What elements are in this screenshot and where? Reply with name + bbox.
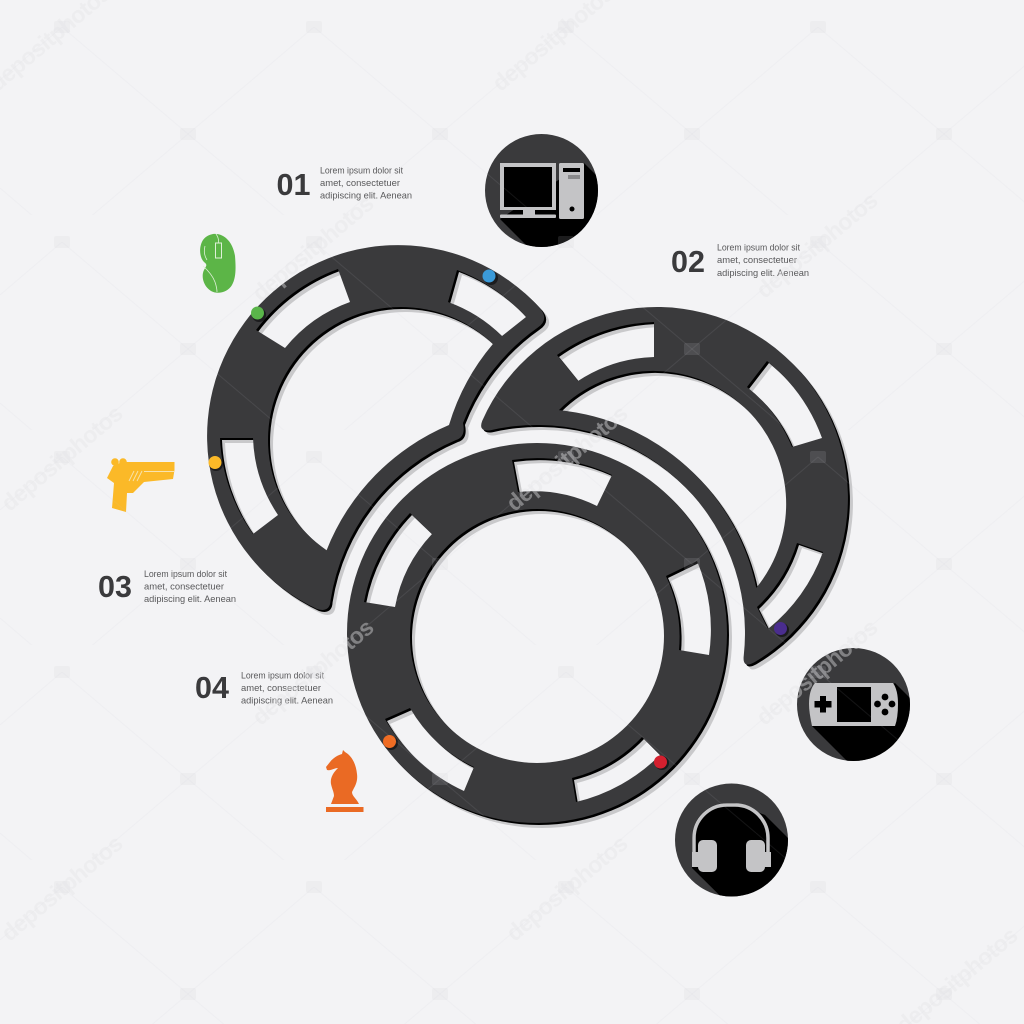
text: depositphotos: [501, 400, 633, 516]
section 02: number and text: adipiscing elit. Aenean: [717, 267, 809, 278]
section 03: number and text: 03: [98, 570, 132, 604]
text: depositphotos: [247, 190, 379, 306]
section 03: number and text: amet, consectetuer: [144, 580, 224, 592]
icon: orange chess knight: [326, 750, 364, 812]
section 04: number and text: Lorem ipsum dolor sit: [241, 670, 324, 680]
section 04: number and text: [195, 670, 333, 706]
text: depositphotos: [247, 614, 379, 730]
section 01: number and text: amet, consectetuer: [320, 177, 400, 188]
section 01: number and text: Lorem ipsum dolor sit: [320, 164, 403, 176]
icon: headphones badge: [675, 784, 788, 896]
section 03: number and text: Lorem ipsum dolor sit: [144, 568, 227, 579]
text: depositphotos: [751, 614, 883, 730]
text: depositphotos: [501, 830, 633, 946]
section 02: number and text: amet, consectetuer: [717, 254, 797, 265]
section 03: number and text: [98, 568, 236, 604]
section 04: number and text: 04: [195, 671, 229, 705]
ring 2: right chip segment: [481, 307, 853, 670]
section 01: number and text: adipiscing elit. Aenean: [320, 190, 412, 200]
section 04: number and text: adipiscing elit. Aenean: [241, 694, 333, 706]
icon: green mouse: [200, 234, 236, 293]
section 03: number and text: adipiscing elit. Aenean: [144, 593, 236, 604]
section 02: number and text: 02: [671, 245, 705, 279]
ring 3: bottom full chip: [347, 443, 732, 828]
text: depositphotos: [751, 187, 883, 303]
section 01: number and text: [276, 164, 412, 202]
section 02: number and text: [671, 242, 809, 279]
section 01: number and text: 01: [276, 168, 310, 202]
section 02: number and text: Lorem ipsum dolor sit: [717, 242, 800, 252]
icon: handheld console badge: [797, 648, 910, 761]
icon: computer badge: [485, 134, 598, 247]
marker dots on rings: [208, 270, 789, 770]
ring 1: top-left chip segment: [207, 245, 549, 615]
section 04: number and text: amet, consectetuer: [241, 682, 321, 693]
icon: yellow gun: [107, 458, 174, 512]
